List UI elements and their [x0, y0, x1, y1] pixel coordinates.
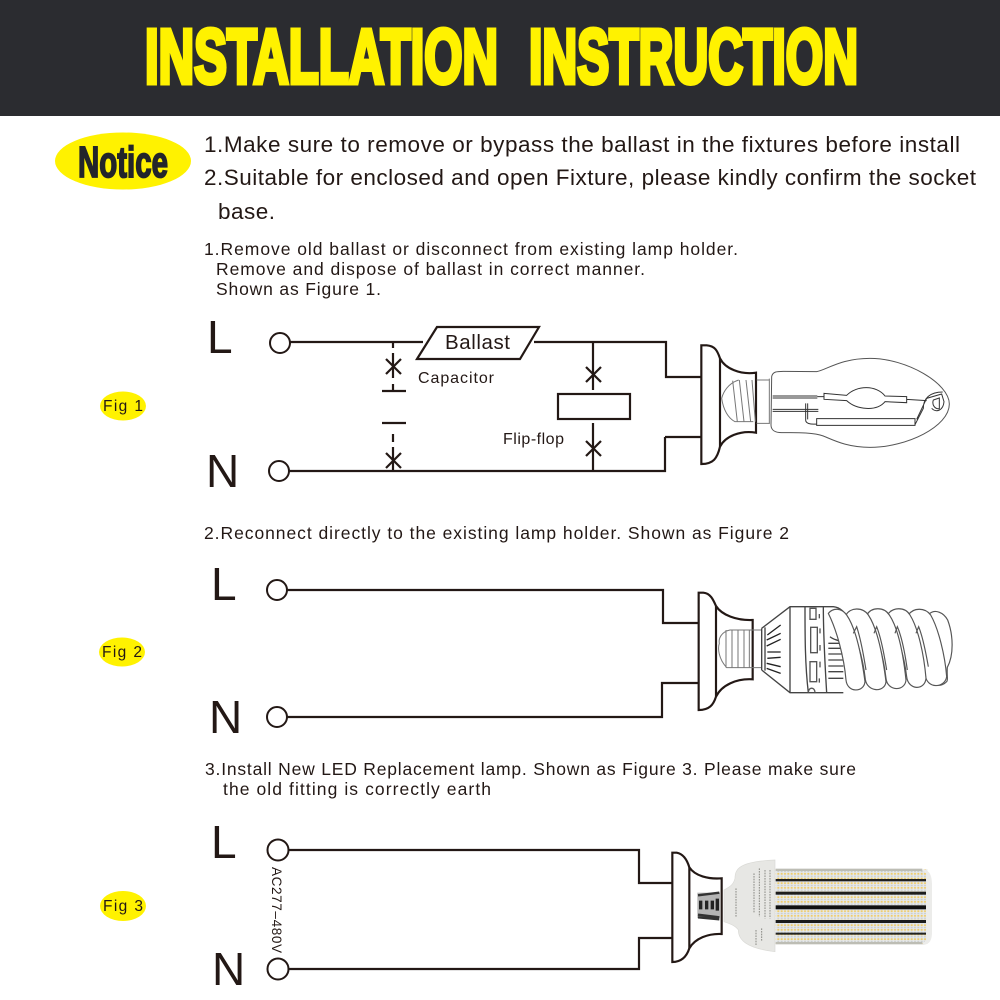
notice badge: Notice: [78, 138, 168, 187]
ballast: Ballast: [445, 331, 510, 354]
step 1 text: 1.Remove old ballast or disconnect from existing lamp holder.: [204, 239, 738, 259]
step 3 text: [205, 759, 856, 799]
icon: socket and spiral CFL bulb: [699, 593, 952, 710]
flip-flop: [503, 342, 630, 471]
notice text: base.: [218, 199, 275, 224]
L terminal: L: [207, 311, 233, 363]
voltage label: AC277–480V: [269, 867, 284, 953]
capacitor: Capacitor: [418, 370, 495, 387]
spiral tube: [828, 609, 952, 690]
ballast: [417, 327, 539, 359]
notice text: 1.Make sure to remove or bypass the ballast in the fixtures before install: [204, 132, 960, 157]
fig 3 label: Fig 3: [103, 898, 143, 915]
lamp head: [724, 860, 775, 952]
notice badge: [55, 132, 191, 190]
fig 2 label: [99, 638, 145, 666]
header banner: [0, 0, 1000, 116]
flip-flop: Flip-flop: [503, 431, 564, 448]
lamp end cap: [922, 869, 932, 945]
notice text: 2.Suitable for enclosed and open Fixture, please kindly confirm the socket: [204, 165, 977, 190]
fig 2 label: Fig 2: [102, 644, 142, 661]
fig 1 label: [100, 392, 146, 420]
icon: socket and HID bulb: [701, 345, 949, 464]
title: INSTALLATION: [145, 14, 498, 100]
lamp screw base: [697, 893, 720, 919]
step 1 text: [204, 239, 738, 299]
fig 3 label: [100, 891, 146, 921]
capacitor: [382, 342, 495, 471]
icon: socket and LED corn lamp: [672, 853, 932, 962]
N terminal: N: [206, 445, 239, 497]
notice text: [204, 132, 977, 224]
N terminal: N: [209, 691, 242, 743]
figure 1 circuit: [206, 311, 949, 497]
step 3 text: the old fitting is correctly earth: [223, 779, 491, 799]
step 1 text: Shown as Figure 1.: [216, 279, 381, 299]
L terminal: L: [211, 558, 237, 610]
figure 3 circuit: [211, 816, 932, 995]
step 2 text: 2.Reconnect directly to the existing lamp holder. Shown as Figure 2: [204, 523, 789, 543]
lamp LED body: [776, 869, 927, 944]
fig 1 label: Fig 1: [103, 398, 143, 415]
N terminal: N: [212, 943, 245, 995]
figure 2 circuit: [209, 558, 952, 743]
L terminal: L: [211, 816, 237, 868]
step 1 text: Remove and dispose of ballast in correct manner.: [216, 259, 645, 279]
step 3 text: 3.Install New LED Replacement lamp. Shown as Figure 3. Please make sure: [205, 759, 856, 779]
